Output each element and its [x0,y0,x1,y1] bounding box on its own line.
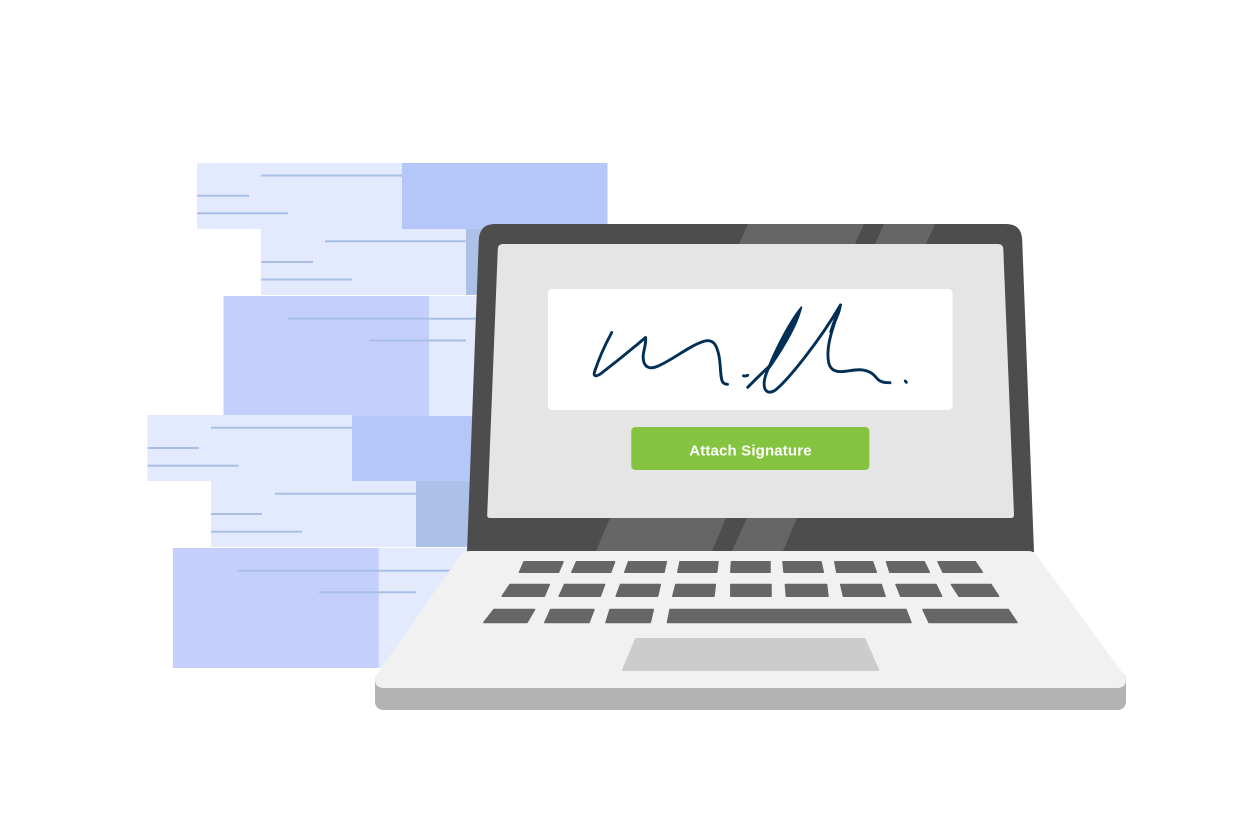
laptop base side [375,672,1126,710]
laptop lid [467,224,1034,552]
keyboard [484,562,1017,622]
document 1 [197,163,608,229]
button label: Attach Signature [689,442,812,460]
trackpad [623,639,878,670]
document 5 [211,481,476,547]
laptop [375,224,1126,710]
document 6 [173,548,479,668]
laptop screen [487,244,1014,518]
document 2 [261,229,526,295]
document 3 [224,296,489,416]
signature panel [548,289,952,410]
key row 3 [484,610,1017,622]
handwritten signature [594,305,906,392]
document stack [148,163,608,668]
thick pen strokes [766,307,802,373]
key row 2 [502,584,999,596]
key row 1 [520,562,982,572]
laptop base top [375,551,1126,688]
document 4 [148,415,482,481]
attach signature button [631,427,869,470]
